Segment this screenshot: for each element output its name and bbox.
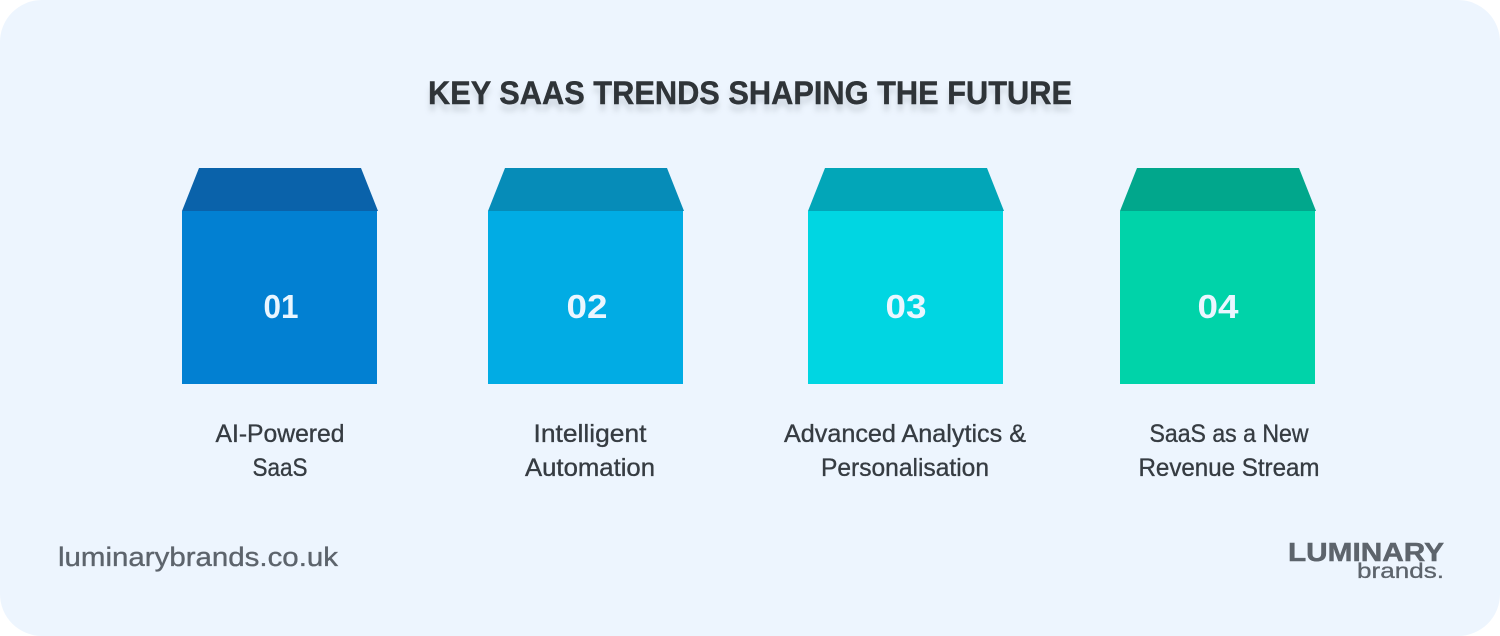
number 04: 04	[1198, 288, 1239, 325]
logo: Luminary brands: brands.	[1357, 560, 1444, 583]
number 01: 01	[264, 288, 298, 325]
title: KEY SAAS TRENDS SHAPING THE FUTURE	[428, 82, 1072, 118]
title: KEY SAAS TRENDS SHAPING THE FUTURE	[428, 75, 1072, 111]
box 04: SaaS as a New Revenue Stream	[1120, 168, 1316, 384]
number 02: 02	[566, 288, 608, 325]
box 03: Advanced Analytics	[808, 168, 1004, 384]
number 03: 03	[886, 288, 926, 325]
label 01: SaaS	[252, 454, 308, 482]
label 04: Revenue Stream	[1138, 454, 1320, 482]
label 04: SaaS as a New	[1150, 420, 1309, 448]
label 03	[784, 420, 1026, 482]
label 01: AI-Powered	[216, 420, 344, 448]
label 04	[1138, 420, 1320, 482]
box 01: AI-Powered SaaS	[182, 168, 378, 384]
website url: luminarybrands.co.uk	[58, 542, 339, 572]
logo: Luminary brands: LUMINARY	[1288, 537, 1444, 567]
label 02: Automation	[525, 454, 655, 482]
label 03: Advanced Analytics &	[784, 420, 1026, 448]
label 01	[216, 420, 344, 482]
label 02: Intelligent	[534, 420, 647, 448]
logo: Luminary brands	[1288, 537, 1444, 583]
label 03: Personalisation	[821, 454, 989, 482]
box 02: Intelligent Automation	[488, 168, 684, 384]
label 02	[525, 420, 655, 482]
